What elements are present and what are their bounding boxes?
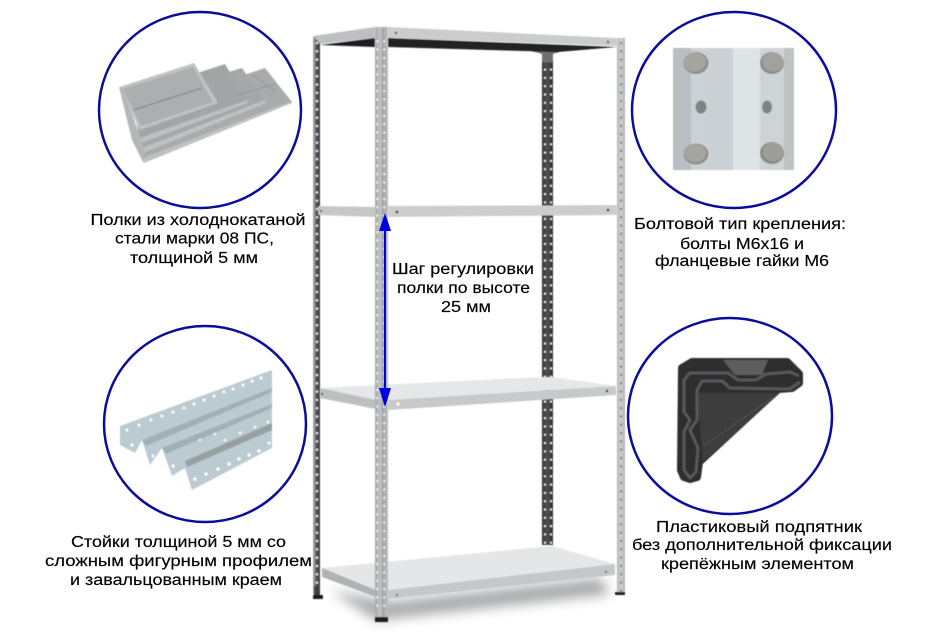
caption: height step: 25 мм [441,299,491,316]
caption: height step: полки по высоте [397,280,530,297]
circle: shelves [99,12,301,208]
caption: uprights: Стойки толщиной 5 мм со [71,534,286,551]
second shelf [318,205,617,217]
caption: bolts: фланцевые гайки М6 [655,253,829,270]
caption: uprights: сложным фигурным профилем [45,553,312,570]
caption: bolts: болты М6х16 и [680,236,804,253]
caption: plastic foot: крепёжным элементом [661,556,854,573]
caption: bolts [634,216,846,270]
caption: plastic foot: Пластиковый подпятник [656,519,862,536]
bottom shelf [322,546,615,599]
rear post [532,46,559,545]
caption: uprights [45,534,312,589]
plastic corner foot [681,360,800,479]
front post [375,27,388,622]
caption: shelves: стали марки 08 ПС, [115,230,274,248]
perforated upright rails [120,370,272,490]
shelving unit [313,27,625,622]
caption: shelves: Полки из холоднокатаной [90,212,306,229]
right post [615,38,625,595]
caption: shelves [90,212,306,267]
height arrow [379,213,391,407]
top shelf [313,27,617,52]
stacked shelf trays [119,63,292,163]
circle: bolts [632,12,836,208]
floor shadow [330,578,610,620]
third shelf [320,377,616,410]
caption: height step: Шаг регулировки [392,261,534,278]
caption: plastic foot: без дополнительной фиксации [632,537,892,554]
caption: uprights: и завальцованным краем [70,572,282,589]
left post [313,37,323,599]
bolt close-up photo [673,48,794,170]
caption: plastic foot [632,519,892,573]
circle: plastic foot [628,318,832,514]
caption: shelves: толщиной 5 мм [130,250,258,267]
circle: uprights [104,326,306,522]
caption: height step [392,261,534,316]
caption: bolts: Болтовой тип крепления: [634,216,846,233]
